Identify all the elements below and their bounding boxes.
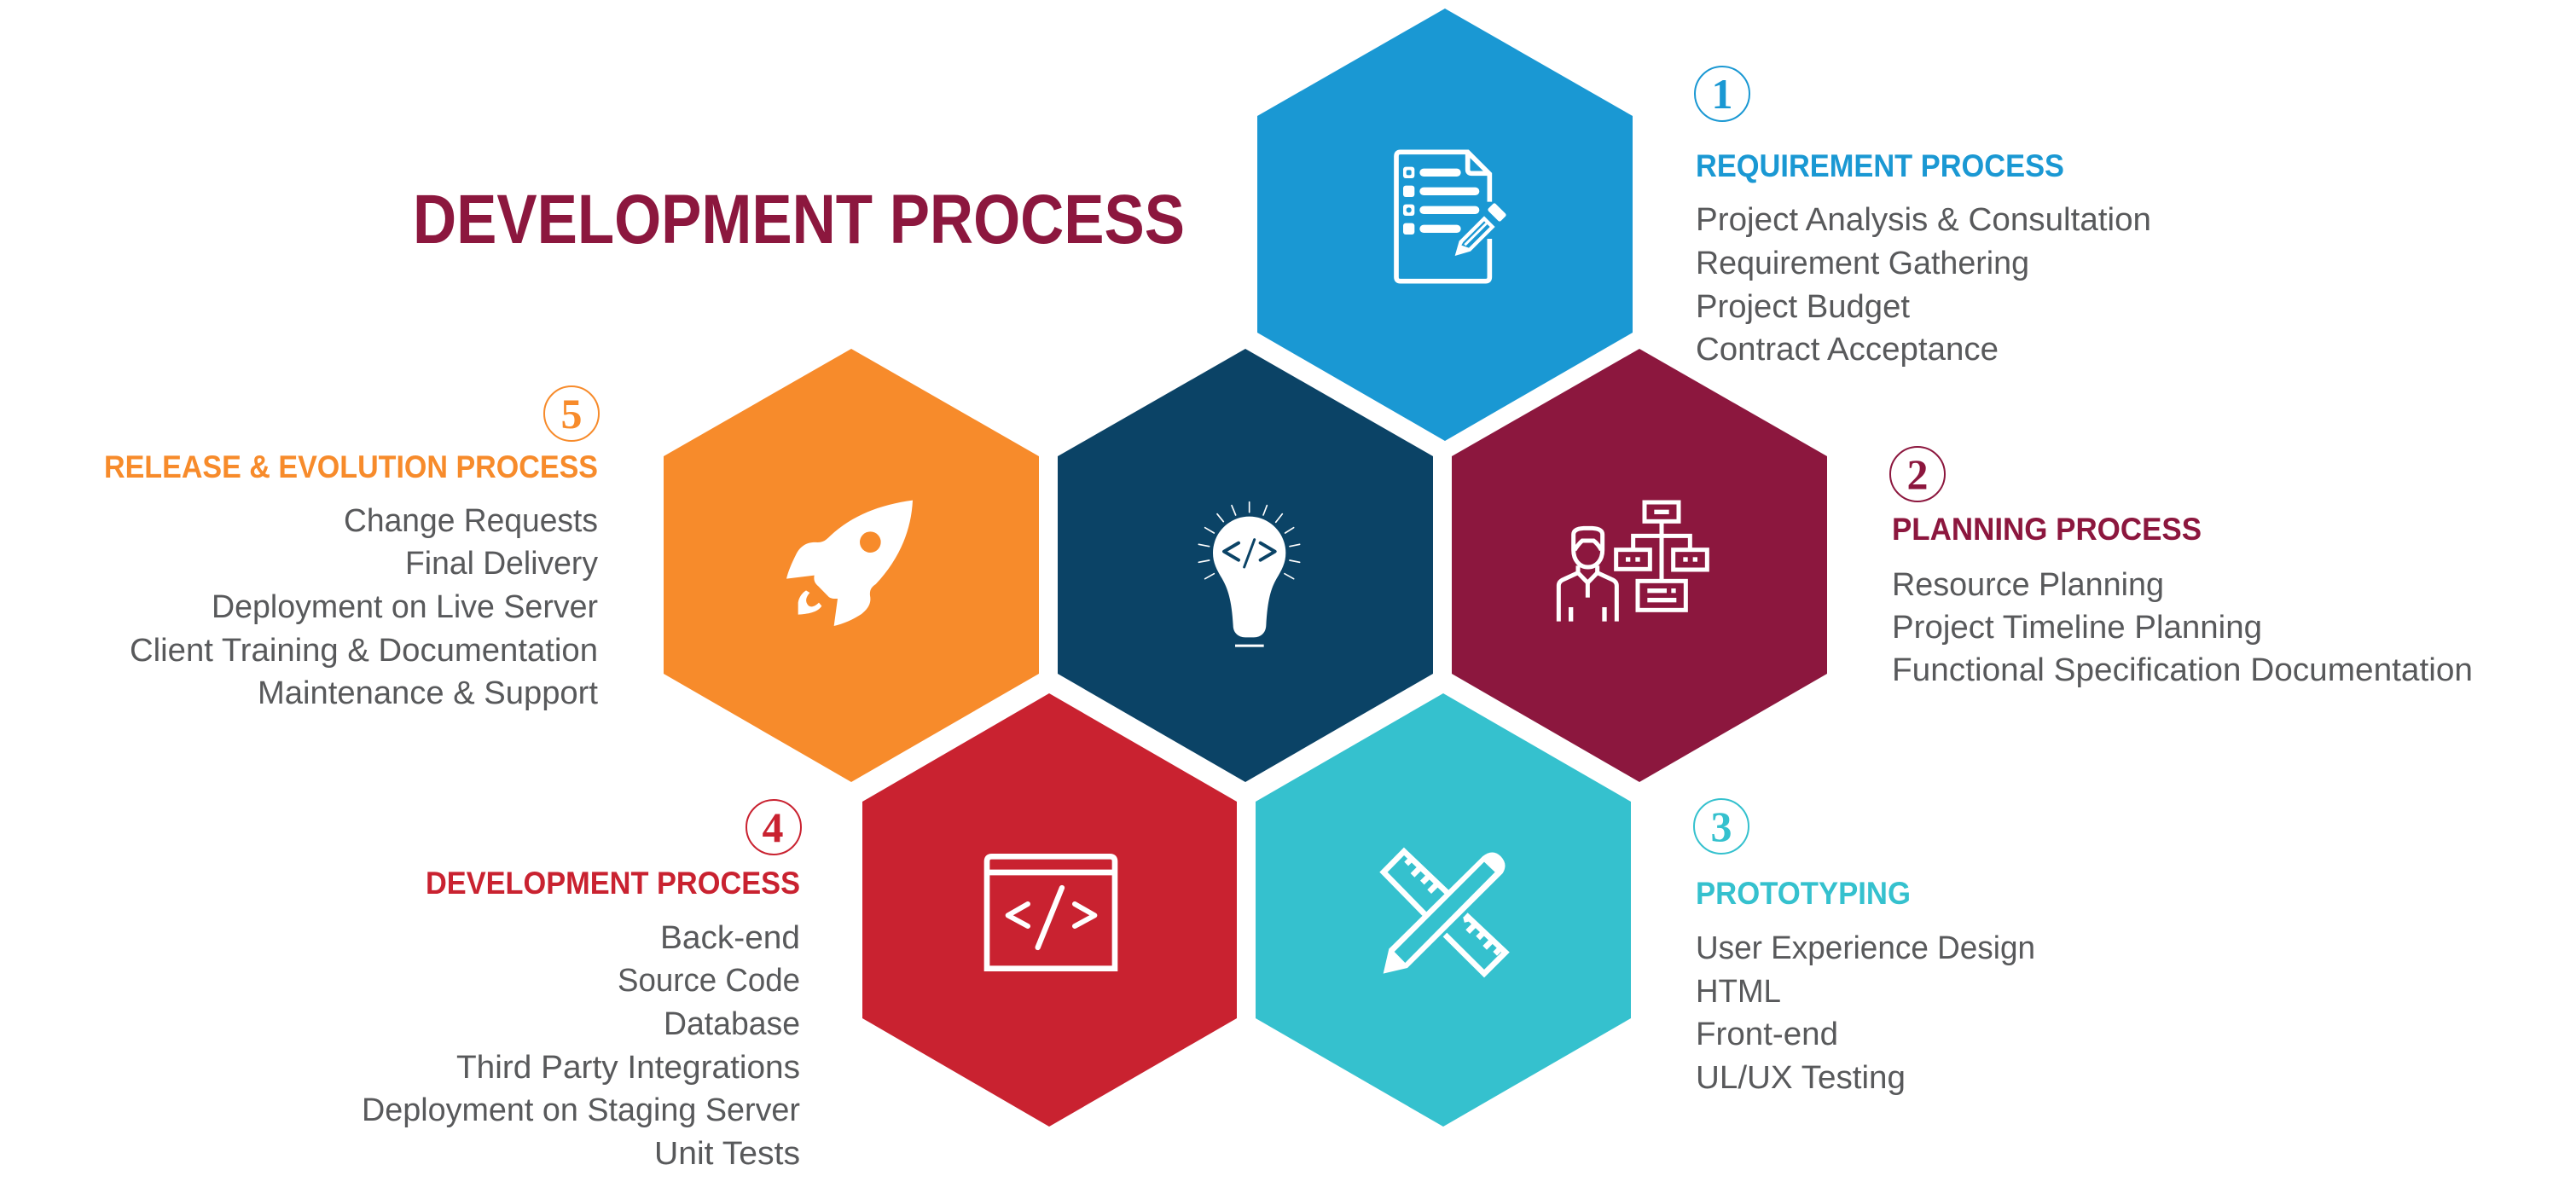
list: requirement items: Requirement Gathering (1696, 246, 2029, 281)
list: planning items: Project Timeline Planning (1892, 610, 2262, 646)
panel: step 4 development process (362, 800, 801, 1172)
heading: release and evolution process: RELEASE & EVOLUTION PROCESS (104, 449, 598, 484)
heading: prototyping: PROTOTYPING (1696, 876, 1911, 911)
title: DEVELOPMENT PROCESS (413, 181, 1185, 258)
list: prototyping items: HTML (1696, 974, 1781, 1010)
list: development items (362, 920, 800, 1172)
list: prototyping items: UL/UX Testing (1696, 1060, 1906, 1096)
icon: document with pencil (1396, 152, 1507, 281)
number badge 2 (1890, 447, 1945, 501)
panel: step 1 requirement process (1695, 67, 2151, 368)
list: planning items (1892, 567, 2473, 688)
list: requirement items: Contract Acceptance (1696, 332, 1999, 368)
list: development items: Source Code (618, 963, 800, 999)
list: development items: Deployment on Staging Server (362, 1092, 800, 1128)
list: prototyping items: User Experience Design (1696, 930, 2035, 966)
list: release items: Change Requests (344, 503, 598, 539)
list: release items: Final Delivery (405, 546, 598, 582)
icon: rocket (786, 501, 913, 626)
list: requirement items: Project Budget (1696, 289, 1910, 325)
icon: light bulb with code (1198, 502, 1300, 647)
number badge 1: 1 (1711, 70, 1733, 118)
list: requirement items: Project Analysis & Consultation (1696, 202, 2151, 238)
list: planning items: Resource Planning (1892, 567, 2164, 603)
list: release items: Client Training & Documentation (130, 633, 598, 669)
heading: requirement process: REQUIREMENT PROCESS (1696, 148, 2064, 183)
heading: development process: DEVELOPMENT PROCESS (426, 866, 800, 901)
number badge 2: 2 (1907, 450, 1928, 498)
list: development items: Third Party Integrations (456, 1050, 800, 1086)
hexagon: planning (maroon) (1452, 349, 1827, 782)
number badge 3 (1694, 799, 1749, 854)
number badge 4: 4 (763, 803, 783, 851)
hexagon: development (red) (862, 693, 1237, 1127)
list: planning items: Functional Specification Documentation (1892, 652, 2473, 688)
list: prototyping items (1696, 930, 2035, 1096)
icon: code window (987, 856, 1115, 969)
list: release items: Maintenance & Support (258, 675, 598, 711)
number badge 1 (1695, 67, 1749, 121)
panel: step 3 prototyping (1694, 799, 2035, 1096)
list: prototyping items: Front-end (1696, 1017, 1838, 1052)
icon: person with org chart (1558, 502, 1707, 622)
panel: step 2 planning process (1890, 447, 2473, 688)
number badge 5 (544, 386, 599, 441)
list: development items: Unit Tests (654, 1136, 800, 1172)
number badge 5: 5 (561, 390, 582, 437)
list: development items: Database (664, 1006, 800, 1042)
heading: planning process: PLANNING PROCESS (1892, 512, 2202, 547)
hexagon: prototyping (teal) (1256, 693, 1631, 1127)
number badge 4 (746, 800, 801, 855)
number badge 3: 3 (1711, 802, 1732, 850)
list: development items: Back-end (660, 920, 800, 956)
hexagon: center (navy) (1058, 349, 1433, 782)
panel: step 5 release and evolution process (104, 386, 599, 711)
list: release items: Deployment on Live Server (212, 589, 598, 625)
list: requirement items (1696, 202, 2151, 368)
hexagon: requirement (blue) (1257, 9, 1633, 441)
hexagon: release (orange) (664, 349, 1039, 782)
list: release items (130, 503, 598, 711)
icon: ruler and pencil (1384, 851, 1506, 974)
